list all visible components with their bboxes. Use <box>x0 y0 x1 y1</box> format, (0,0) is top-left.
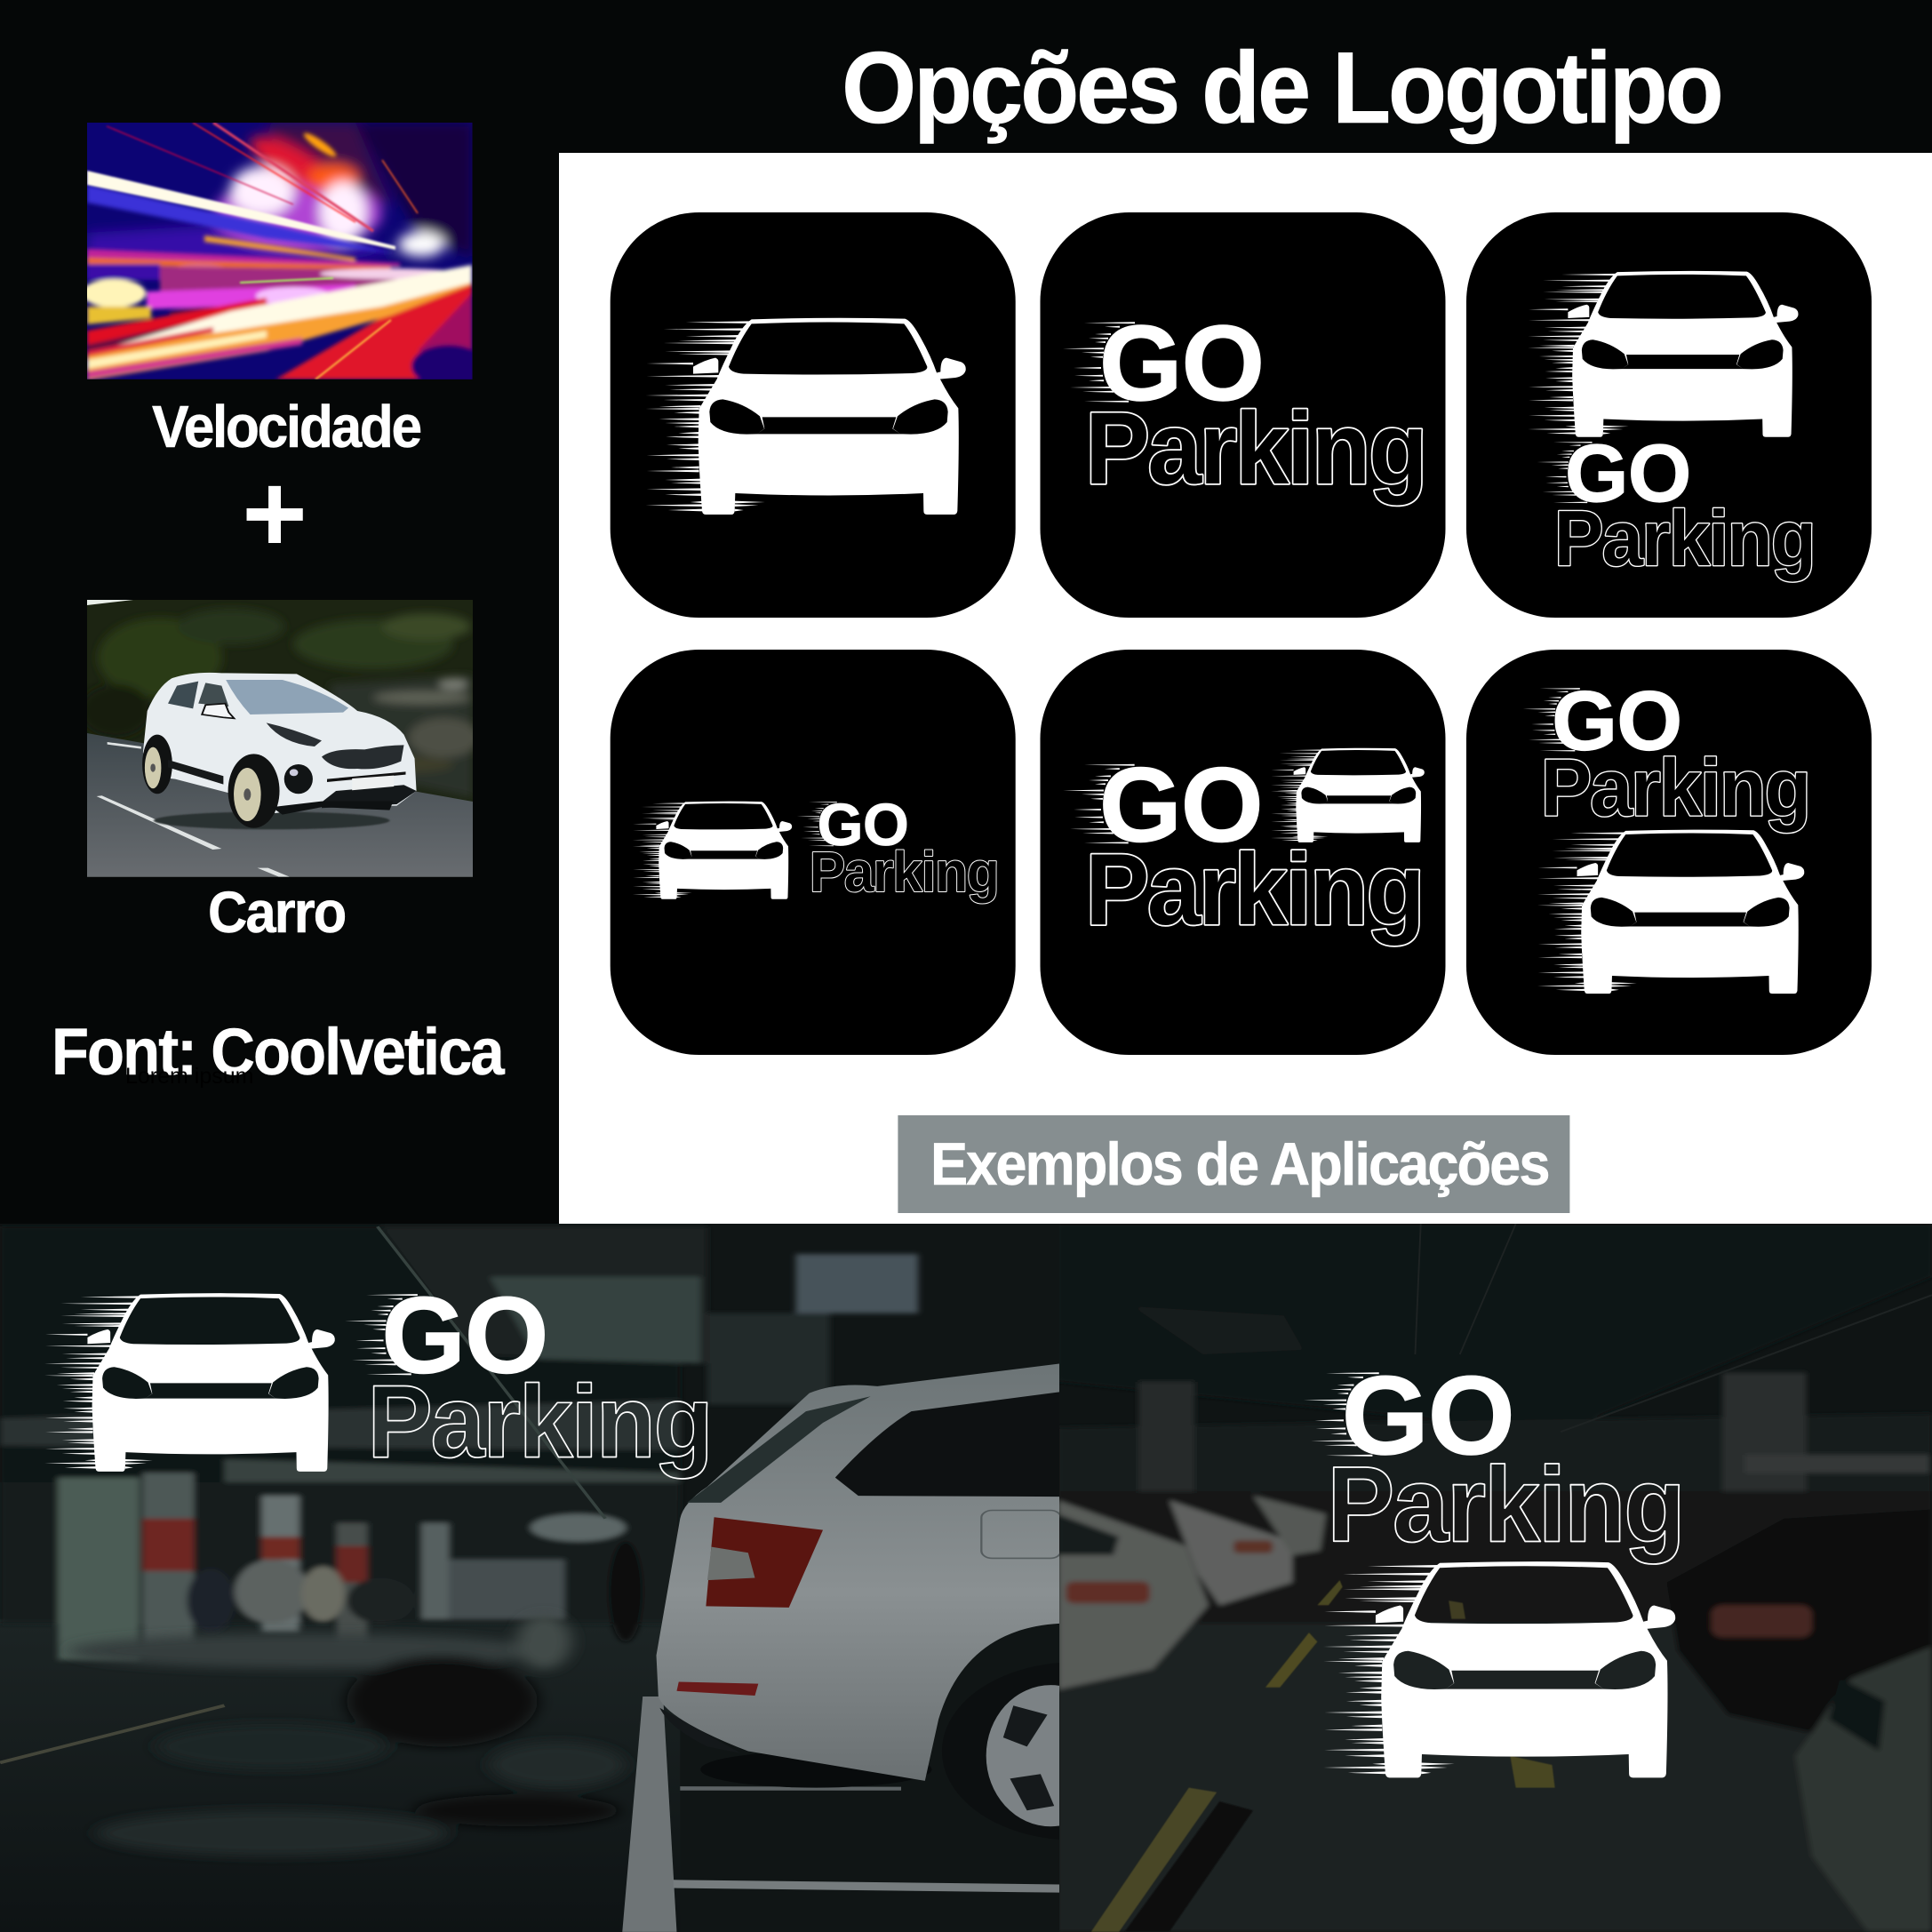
wordmark: Go Parking <box>1523 674 1811 833</box>
label: carro: Carro <box>208 879 347 945</box>
wordmark: Go Parking: Parking <box>1541 743 1811 833</box>
wordmark: Go Parking: GO <box>1552 674 1682 768</box>
logo tile 5: wordmark with small car <box>1040 650 1445 1055</box>
wordmark: Go Parking: GO <box>818 793 909 858</box>
wordmark: Go Parking <box>1063 304 1428 506</box>
tile background <box>611 650 1016 1055</box>
wordmark: Go Parking: Parking <box>1327 1445 1686 1564</box>
logo tile 1: car only <box>611 212 1016 618</box>
icon: speeding car <box>633 802 792 899</box>
tile background <box>1040 650 1445 1055</box>
panel: inspiration column <box>52 123 506 1090</box>
wordmark: Go Parking: GO <box>1342 1353 1515 1478</box>
wordmark: Go Parking: Parking <box>367 1364 714 1480</box>
tile background <box>1466 650 1872 1055</box>
wordmark: Go Parking: GO <box>1565 428 1691 519</box>
photo: white SUV on road <box>80 600 480 877</box>
photo: dim garage with parked cars <box>1058 1224 1932 1932</box>
wordmark: Go Parking: GO <box>381 1275 548 1396</box>
wordmark: Go Parking <box>1537 428 1816 582</box>
label text: Exemplos de Aplicações <box>930 1130 1551 1197</box>
icon: speeding car <box>646 318 966 515</box>
wordmark: Go Parking: GO <box>1099 746 1263 865</box>
wordmark: Go Parking <box>1063 746 1425 946</box>
logo tile 2: wordmark <box>1040 212 1445 618</box>
icon: speeding car <box>1323 1561 1675 1777</box>
tile background <box>611 212 1016 618</box>
photo: garage with silver car <box>0 1224 1059 1932</box>
tile background <box>1466 212 1872 618</box>
logo tile 3: car above wordmark <box>1466 212 1872 618</box>
faint hidden placeholder text: Lorem ipsum <box>125 1064 254 1089</box>
label: velocidade: Velocidade <box>152 393 422 459</box>
title: Opções de Logotipo <box>842 30 1724 145</box>
plus sign: + <box>242 451 307 576</box>
wordmark: Go Parking <box>345 1275 714 1480</box>
label: font name: Font: Coolvetica <box>52 1016 506 1090</box>
wordmark: Go Parking: Parking <box>1085 832 1425 946</box>
wordmark: Go Parking: Parking <box>1085 390 1428 506</box>
wordmark: Go Parking <box>1304 1353 1686 1564</box>
icon: speeding car <box>1528 271 1799 437</box>
application 1: logo over parking garage photo <box>0 1224 1059 1932</box>
application 2: logo over dark garage photo <box>1058 1224 1932 1932</box>
wordmark: Go Parking: Parking <box>810 842 1000 904</box>
wordmark: Go Parking <box>797 793 1000 904</box>
wordmark: Go Parking: GO <box>1099 304 1265 423</box>
label background <box>898 1115 1569 1213</box>
logo tile 4: car beside wordmark <box>611 650 1016 1055</box>
photo: velocity light trails <box>82 123 486 387</box>
logo tile 6: wordmark above car <box>1466 650 1872 1055</box>
tile background <box>1040 212 1445 618</box>
icon: speeding car <box>1271 748 1425 842</box>
section label: application examples <box>898 1115 1569 1213</box>
icon: speeding car <box>44 1293 335 1472</box>
wordmark: Go Parking: Parking <box>1554 495 1816 582</box>
panel: white logo options area <box>559 153 1932 1224</box>
icon: speeding car <box>1537 830 1804 994</box>
